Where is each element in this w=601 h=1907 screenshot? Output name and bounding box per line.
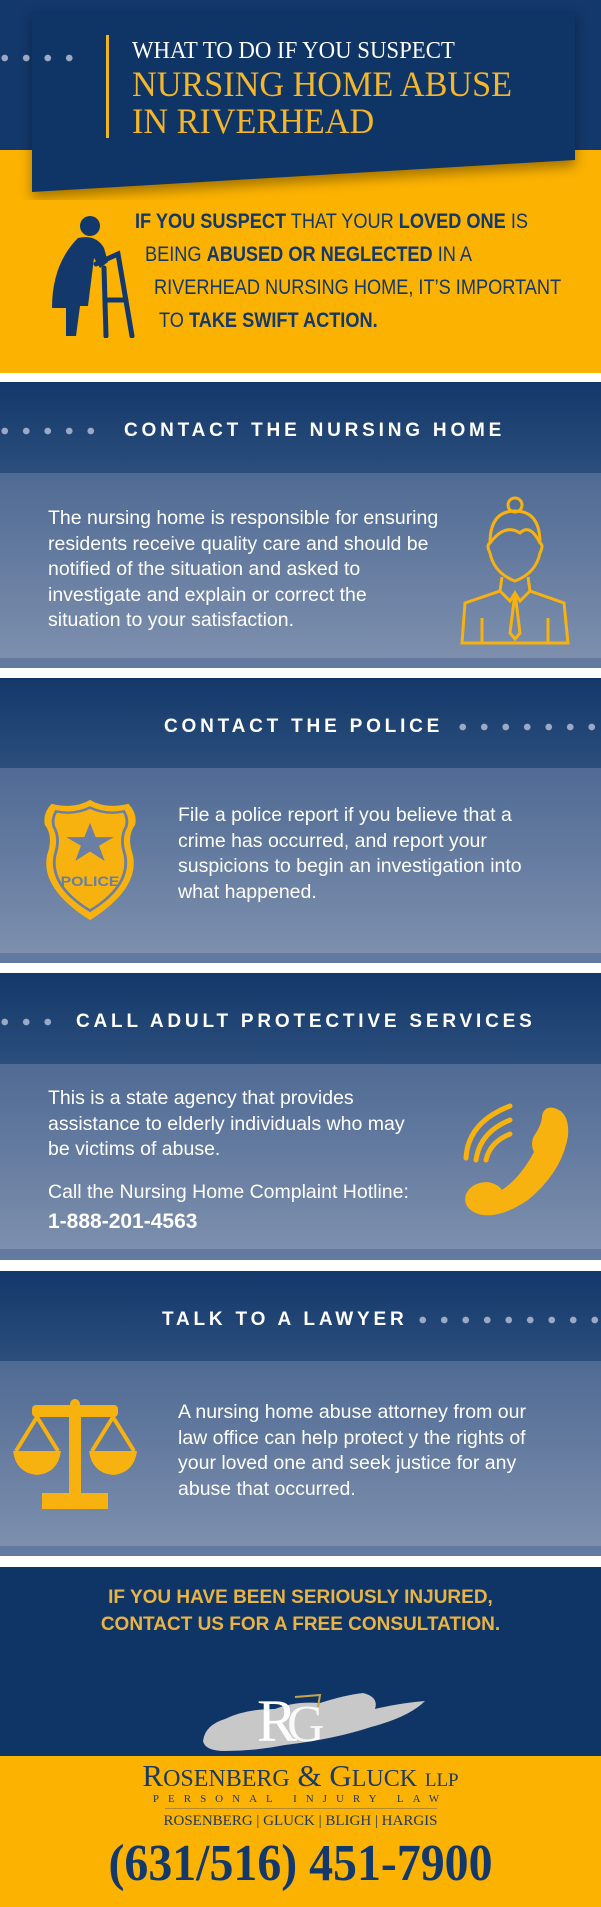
logo: R	[257, 1688, 297, 1754]
panel	[0, 473, 601, 668]
panel: law office can help protect y the rights of	[178, 1426, 526, 1448]
footer: call to action: CONTACT US FOR A FREE CONSULTATION.	[101, 1614, 500, 1635]
panel: notified of the situation and asked to	[48, 558, 360, 580]
intro text	[135, 210, 561, 332]
intro text: RIVERHEAD NURSING HOME, IT’S IMPORTANT	[154, 276, 561, 299]
panel	[0, 768, 601, 963]
yellow rule	[106, 35, 109, 138]
panel: investigate and explain or correct the	[48, 584, 367, 606]
icon: phone	[464, 1104, 568, 1216]
panel: A nursing home abuse attorney from our	[178, 1401, 526, 1423]
panel: This is a state agency that provides	[48, 1087, 354, 1109]
footer: firm info: ROSENBERG & GLUCK LLP	[142, 1758, 459, 1793]
title text: NURSING HOME ABUSE	[132, 64, 512, 104]
top background bands	[0, 0, 601, 150]
title text	[132, 38, 512, 141]
footer: call to action: IF YOU HAVE BEEN SERIOUSLY INJURED,	[108, 1587, 493, 1608]
panel: your loved one and seek justice for any	[178, 1452, 516, 1474]
section 4: talk to a lawyer	[0, 1271, 601, 1556]
panel: File a police report if you believe that a	[178, 804, 512, 826]
icon: police badge	[44, 800, 136, 920]
panel: crime has occurred, and report your	[178, 830, 487, 852]
icon: scales of justice	[13, 1399, 137, 1509]
footer: firm info	[0, 1756, 601, 1907]
panel: suspicions to begin an investigation into	[178, 855, 522, 877]
icon: nurse	[460, 496, 570, 644]
panel	[0, 1064, 601, 1260]
header: TALK TO A LAWYER	[162, 1309, 408, 1330]
panel: what happened.	[178, 880, 317, 902]
header	[0, 1271, 601, 1361]
logo: G	[287, 1696, 325, 1753]
panel	[0, 1361, 601, 1556]
footer: firm info: ROSENBERG | GLUCK | BLIGH | HARGIS	[163, 1813, 438, 1829]
header	[0, 973, 601, 1064]
title text: WHAT TO DO IF YOU SUSPECT	[132, 38, 455, 64]
section 1: contact the nursing home	[0, 382, 601, 668]
panel: residents receive quality care and should be	[48, 532, 428, 554]
panel: situation to your satisfaction.	[48, 609, 294, 631]
footer: firm info: PERSONAL INJURY LAW	[153, 1793, 448, 1805]
panel: Call the Nursing Home Complaint Hotline:	[48, 1181, 409, 1203]
intro text: IF YOU SUSPECT THAT YOUR LOVED ONE IS	[135, 210, 528, 233]
header	[0, 382, 601, 473]
panel: 1-888-201-4563	[48, 1210, 197, 1233]
phone number: (631/516) 451-7900	[108, 1835, 493, 1892]
logo	[203, 1688, 425, 1754]
header	[0, 678, 601, 768]
panel: The nursing home is responsible for ensuring	[48, 507, 438, 529]
panel: abuse that occurred.	[178, 1478, 356, 1500]
icon: elderly person with walker	[52, 216, 134, 338]
intro text: TO TAKE SWIFT ACTION.	[159, 309, 378, 332]
decorative dots	[0, 54, 84, 62]
title banner	[1, 16, 582, 200]
header: CALL ADULT PROTECTIVE SERVICES	[76, 1011, 536, 1032]
footer: call to action	[0, 1567, 601, 1757]
section 3: call adult protective services	[0, 973, 601, 1260]
panel: assistance to elderly individuals who may	[48, 1112, 405, 1134]
panel: be victims of abuse.	[48, 1138, 220, 1160]
icon: police badge: POLICE	[61, 875, 120, 889]
title text: IN RIVERHEAD	[132, 101, 374, 141]
header: CONTACT THE NURSING HOME	[124, 420, 505, 441]
section 2: contact the police	[0, 678, 601, 963]
header: CONTACT THE POLICE	[164, 716, 443, 737]
intro text: BEING ABUSED OR NEGLECTED IN A	[145, 243, 472, 266]
